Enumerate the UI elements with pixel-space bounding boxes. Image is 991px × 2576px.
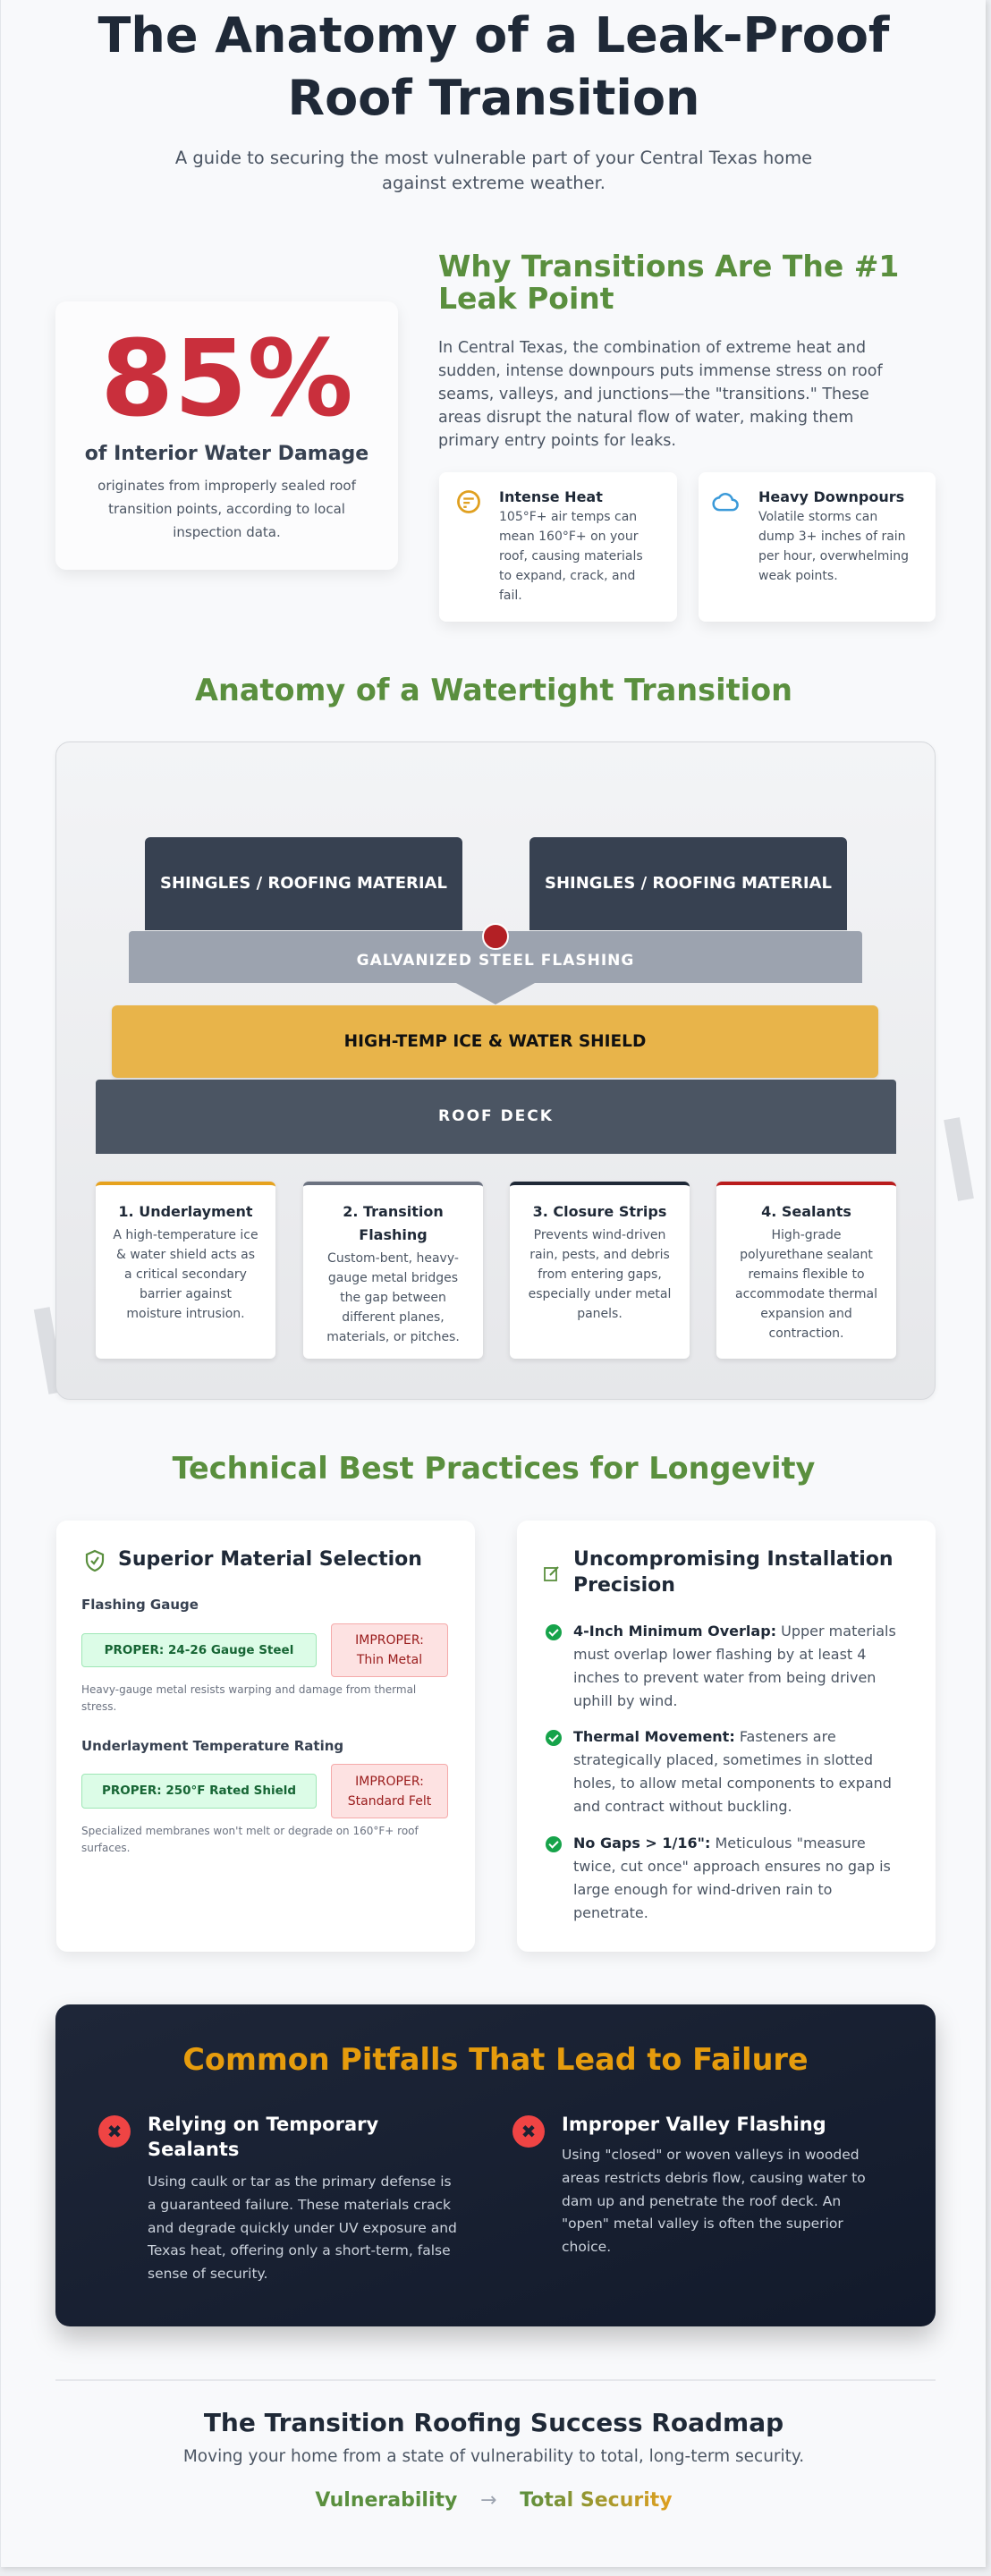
proper box 2: PROPER: 250°F Rated Shield [102, 1784, 296, 1798]
card: underlayment [96, 1182, 275, 1359]
pitfall 1: sense of security. [148, 2266, 267, 2282]
card: transition flashing: Custom-bent, heavy-gauge metal bridges the gap between different planes, materials, or pitches. [326, 1251, 460, 1344]
card: underlayment: 1. Underlayment [118, 1203, 253, 1220]
card: closure strips: Prevents wind-driven rain, pests, and debris from entering gaps, especially under metal panels. [529, 1228, 671, 1321]
layer: roof deck: ROOF DECK [438, 1107, 554, 1125]
improper box 1 [331, 1623, 448, 1677]
card: sealants: 4. Sealants [761, 1203, 851, 1220]
card: closure strips: 3. Closure Strips [533, 1203, 666, 1220]
caption 1: Heavy-gauge metal resists warping and damage from thermal stress. [81, 1683, 416, 1713]
pitfall 2: Using "closed" or woven valleys in wooded areas restricts debris flow, causing water to dam up and penetrate the roof deck. An "open" metal valley is often the superior choice. [562, 2147, 866, 2255]
title: Roof Transition [287, 70, 699, 126]
proper box 1 [81, 1633, 317, 1667]
red sealant dot [482, 923, 509, 950]
heat text: Intense Heat [499, 488, 603, 505]
layer: flashing: GALVANIZED STEEL FLASHING [357, 952, 634, 970]
card: sealants: High-grade polyurethane sealant remains flexible to accommodate thermal expansion and contraction. [735, 1228, 877, 1341]
bullet: no gaps: No Gaps > 1/16": Meticulous "measure twice, cut once" approach ensures no gap is large enough for wind-driven rain to penetrate. [573, 1835, 891, 1921]
improper box 2: IMPROPER: [355, 1775, 424, 1789]
layer: ice & water shield: HIGH-TEMP ICE & WATER SHIELD [344, 1032, 646, 1051]
installation title: Uncompromising Installation Precision [573, 1548, 894, 1597]
heat text: 105°F+ air temps can mean 160°F+ on your roof, causing materials to expand, crack, and fail. [499, 510, 643, 603]
layer: shingles right: SHINGLES / ROOFING MATERIAL [545, 874, 832, 893]
panel: material selection [56, 1521, 475, 1952]
stat description: originates from improperly sealed roof transition points, according to local inspection data. [97, 478, 356, 540]
panel: common pitfalls [55, 2004, 936, 2326]
title: The Anatomy of a Leak-Proof [98, 7, 889, 64]
footer title: The Transition Roofing Success Roadmap [204, 2408, 783, 2437]
stat card: 85% [55, 301, 398, 570]
subtitle: A guide to securing the most vulnerable part of your Central Texas home [175, 148, 812, 168]
layer: roof deck [96, 1080, 896, 1154]
bullet: overlap: 4-Inch Minimum Overlap: Upper materials must overlap lower flashing by at least 4 inches to prevent water from being driven uphill by wind. [573, 1623, 896, 1709]
stat label: of Interior Water Damage [85, 443, 368, 465]
heading: best practices: Technical Best Practices for Longevity [173, 1451, 815, 1486]
pitfall 1: Relying on Temporary Sealants [148, 2114, 378, 2160]
pitfall 2 [512, 2114, 866, 2255]
bullet: thermal movement: Thermal Movement: Fasteners are strategically placed, sometimes in slotted holes, to allow metal components to expand and contract without buckling. [573, 1728, 892, 1815]
icon: x [512, 2115, 545, 2148]
heading: anatomy: Anatomy of a Watertight Transition [195, 673, 792, 708]
heading: why transitions: Why Transitions Are The #1 Leak Point [438, 249, 899, 316]
icon: x [98, 2115, 131, 2148]
card: transition flashing [303, 1182, 483, 1359]
layer: shingles left: SHINGLES / ROOFING MATERIAL [160, 874, 447, 893]
subtitle [175, 148, 812, 193]
card: transition flashing: 2. Transition Flashing [343, 1203, 444, 1243]
proper box 2 [81, 1774, 317, 1809]
card: underlayment: A high-temperature ice & water shield acts as a critical secondary barrier against moisture intrusion. [113, 1228, 258, 1321]
improper box 2: Standard Felt [348, 1794, 431, 1809]
card: heavy downpours [699, 472, 936, 622]
icon: heat [457, 490, 480, 513]
big stat number: 85% [100, 317, 353, 440]
layer: ice & water shield [112, 1005, 878, 1078]
title: Superior Material Selection [118, 1548, 422, 1571]
pitfall 1: and degrade quickly under UV exposure and [148, 2220, 457, 2236]
proper box 1: PROPER: 24-26 Gauge Steel [105, 1643, 293, 1657]
title [98, 7, 890, 126]
pitfall 1 [98, 2114, 457, 2282]
downpour text: Heavy Downpours [758, 488, 904, 505]
pitfall 2: Improper Valley Flashing [562, 2114, 826, 2135]
decorative slash left [34, 1307, 64, 1394]
card: closure strips [510, 1182, 690, 1359]
icon: cloud [712, 493, 739, 512]
subheading: flashing gauge: Flashing Gauge [81, 1597, 199, 1613]
subtitle: against extreme weather. [382, 173, 606, 193]
pitfall 1: Texas heat, offering only a short-term, false [148, 2242, 451, 2258]
icon: shield [86, 1549, 104, 1572]
pitfall 1: a guaranteed failure. These materials crack [148, 2197, 451, 2213]
footer subtitle: Moving your home from a state of vulnerability to total, long-term security. [183, 2447, 804, 2466]
icon: edit [544, 1566, 559, 1581]
layer: shingles left [145, 837, 462, 930]
panel: layer diagram [55, 741, 936, 1400]
improper box 1: IMPROPER: [355, 1633, 424, 1648]
layer: flashing [129, 931, 862, 1004]
paragraph: why: In Central Texas, the combination of extreme heat and sudden, intense downpours puts immense stress on roof seams, valleys, and junctions—the "transitions." These areas disrupt the natural flow of water, making them primary entry points for leaks. [438, 339, 883, 450]
panel: installation precision [517, 1521, 936, 1952]
icon: x: ✖ [107, 2121, 122, 2142]
decorative slash right [944, 1117, 974, 1201]
improper box 1: Thin Metal [357, 1653, 422, 1667]
caption 2: Specialized membranes won't melt or degrade on 160°F+ roof surfaces. [81, 1825, 419, 1854]
improper box 2 [331, 1764, 448, 1818]
layer: shingles right [529, 837, 847, 930]
roadmap: vulnerability to security: Vulnerability → Total Security [315, 2489, 673, 2512]
pitfalls heading: Common Pitfalls That Lead to Failure [182, 2042, 809, 2077]
pitfall 1: Using caulk or tar as the primary defense is [148, 2174, 452, 2190]
subheading: underlayment rating: Underlayment Temperature Rating [81, 1738, 343, 1754]
downpour text: Volatile storms can dump 3+ inches of rain per hour, overwhelming weak points. [758, 510, 909, 583]
card: intense heat [439, 472, 677, 622]
icon: x: ✖ [521, 2121, 536, 2142]
card: sealants [716, 1182, 896, 1359]
